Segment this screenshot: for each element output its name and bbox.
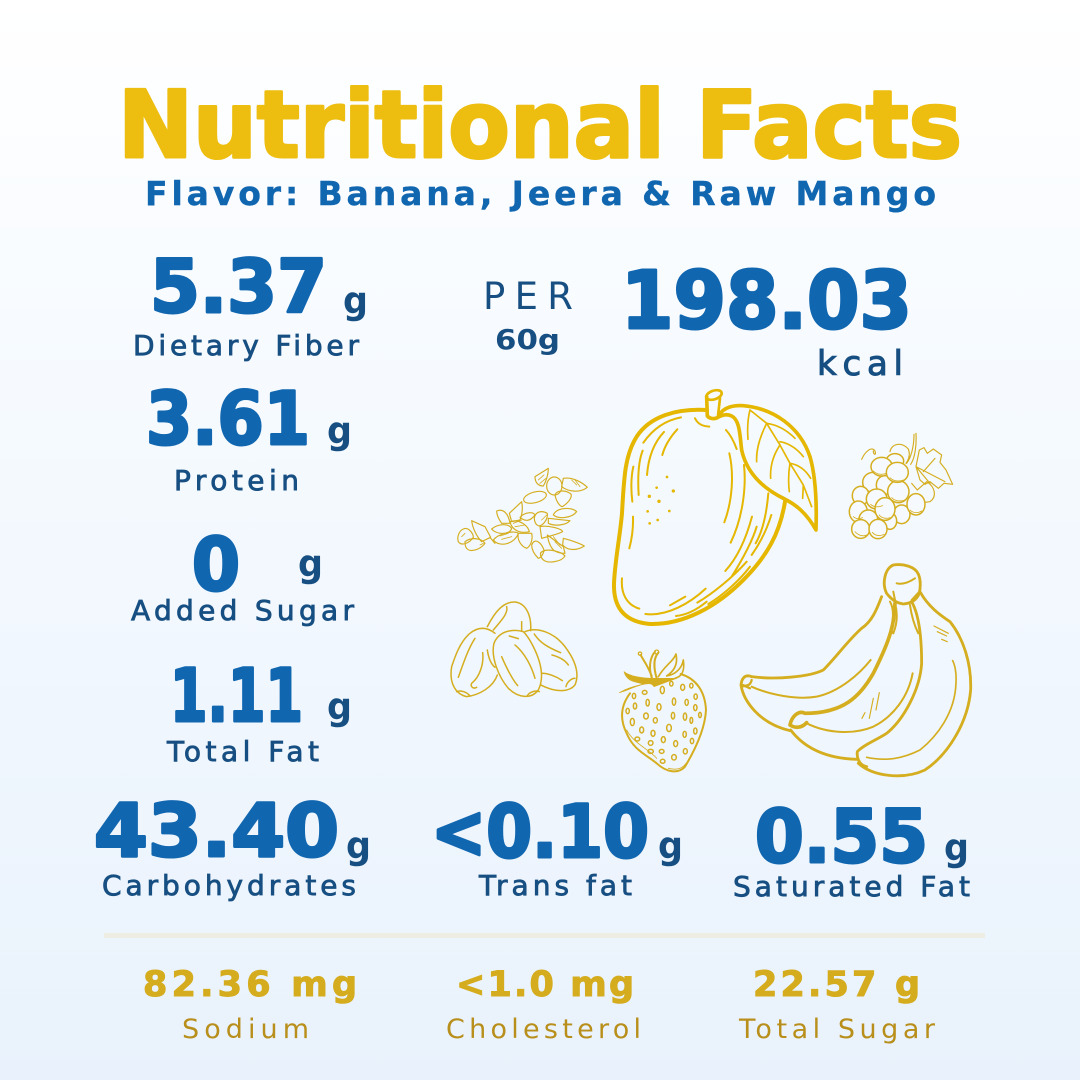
stat: saturated fat: 0.55	[755, 795, 928, 880]
subtitle: flavor: Flavor: Banana, Jeera & Raw Mango	[145, 174, 936, 213]
stat: saturated fat: Saturated Fat	[733, 870, 970, 903]
stat: cholesterol: <1.0 mg	[456, 965, 634, 1005]
stat: saturated fat	[733, 795, 970, 903]
stat: cholesterol	[446, 965, 641, 1045]
stat: sodium	[143, 965, 357, 1045]
stat: total fat: g	[327, 685, 352, 728]
serving size: per 60g	[483, 275, 573, 356]
stat: trans fat: Trans fat	[478, 869, 632, 902]
serving size: per 60g: PER	[483, 275, 573, 318]
stat: dietary fiber: Dietary Fiber	[133, 329, 359, 362]
stat: cholesterol: Cholesterol	[446, 1014, 641, 1045]
stat: added sugar	[131, 523, 354, 627]
stat: trans fat: <0.10	[431, 790, 649, 875]
stat: carbohydrates: g	[346, 824, 371, 867]
calories: kcal	[817, 344, 903, 384]
stat: dietary fiber: 5.37	[150, 245, 327, 330]
stat: protein: g	[327, 409, 352, 452]
stat: added sugar: g	[298, 542, 323, 585]
icon: dates	[451, 602, 577, 697]
stat: total fat: 1.11	[170, 654, 303, 739]
icon: strawberry	[619, 650, 706, 771]
icon: grapes with vine leaf	[849, 433, 953, 539]
stat: carbohydrates: Carbohydrates	[102, 869, 356, 902]
stat: carbohydrates	[94, 789, 371, 902]
stat: total sugar: 22.57 g	[753, 965, 920, 1005]
title: Nutritional Facts	[118, 71, 962, 179]
calories: 198.03	[621, 255, 912, 347]
stat: protein: 3.61	[146, 377, 310, 462]
stat: protein	[146, 377, 352, 497]
stat: dietary fiber: g	[343, 279, 368, 322]
stat: sodium: 82.36 mg	[143, 965, 357, 1005]
stat: protein: Protein	[174, 464, 299, 497]
stat: sodium: Sodium	[182, 1014, 309, 1045]
stat: total sugar	[738, 965, 936, 1045]
stat: dietary fiber	[133, 245, 368, 362]
stat: saturated fat: g	[944, 826, 969, 869]
stat: total sugar: Total Sugar	[738, 1014, 936, 1045]
calories	[621, 255, 912, 384]
stat: carbohydrates: 43.40	[94, 789, 339, 874]
icon: mango with leaf	[614, 388, 816, 624]
icon: bananas	[741, 565, 971, 776]
stat: added sugar: Added Sugar	[131, 594, 354, 627]
stat: added sugar: 0	[192, 523, 240, 608]
stat: trans fat: g	[658, 824, 683, 867]
divider	[104, 933, 985, 938]
icon: seeds	[458, 468, 587, 562]
stat: total fat: Total Fat	[166, 735, 319, 768]
serving size: per 60g: 60g	[495, 323, 560, 356]
